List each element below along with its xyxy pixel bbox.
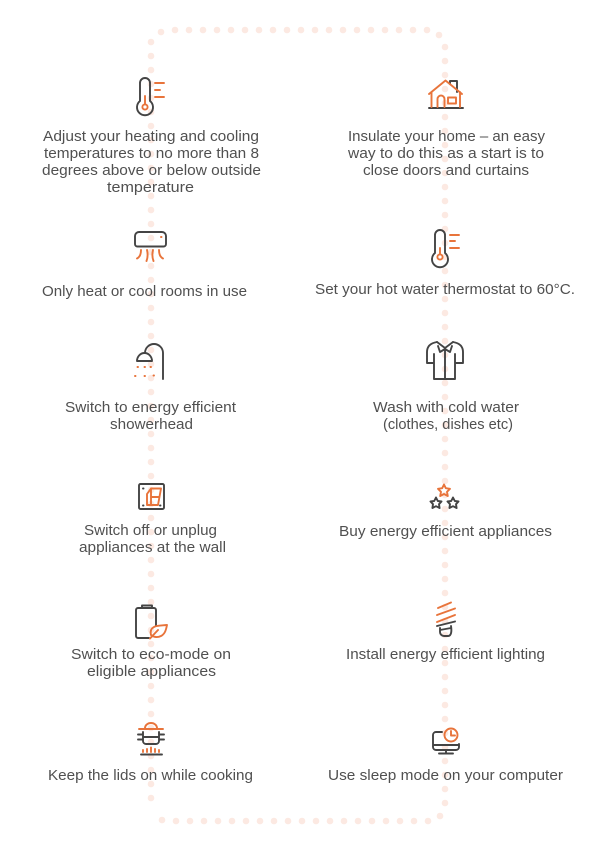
icon: battery with leaf: [136, 606, 167, 638]
text: showerhead: [65, 399, 237, 433]
text: lids: Keep the lids on while cooking: [48, 767, 253, 784]
tip: eco-mode: [71, 606, 231, 680]
text: eco-mode: eligible appliances: [87, 663, 216, 680]
tip: buy efficient appliances: [339, 484, 552, 540]
text: switch off: [79, 522, 226, 556]
tip: keep lids on: [48, 723, 253, 784]
text: insulate: [347, 128, 545, 179]
text: switch off: Switch off or unplug: [84, 522, 217, 539]
text: buy: Buy energy efficient appliances: [339, 523, 552, 540]
text: insulate: way to do this as a start is to: [347, 145, 544, 162]
text: adjust heating: degrees above or below outside: [42, 162, 261, 179]
tip: sleep mode: [328, 728, 563, 784]
text: sleep: Use sleep mode on your computer: [328, 767, 563, 784]
text: adjust heating: Adjust your heating and cooling: [43, 128, 259, 145]
icon: wall switch: [139, 484, 164, 509]
text: switch off: appliances at the wall: [79, 539, 226, 556]
text: eco-mode: [71, 646, 231, 680]
tip: only heat or cool rooms in use: [42, 232, 247, 300]
tip: wash with cold water: [373, 342, 519, 433]
text: wash: (clothes, dishes etc): [383, 416, 513, 433]
icon: showerhead: [135, 344, 163, 379]
icon: thermometer: [432, 230, 459, 267]
tip: adjust heating and cooling: [42, 78, 261, 196]
text: only heat: Only heat or cool rooms in use: [42, 283, 247, 300]
tip: switch off or unplug: [79, 484, 226, 556]
text: insulate: Insulate your home – an easy: [348, 128, 545, 145]
text: lighting: Install energy efficient lighting: [346, 646, 545, 663]
dotted border path: [151, 29, 445, 823]
icon: three stars: [430, 484, 458, 508]
icon: air conditioner: [135, 232, 166, 261]
text: adjust heating: temperature: [107, 179, 194, 196]
icon: spiral bulb: [437, 602, 455, 636]
icon: computer with clock: [433, 728, 459, 754]
text: thermostat: Set your hot water thermostat to 60°C.: [315, 281, 575, 298]
icon: shirt: [427, 342, 463, 379]
tip: insulate your home: [347, 80, 545, 179]
icon: thermometer: [137, 78, 164, 115]
tip: energy efficient showerhead: [65, 344, 237, 433]
text: showerhead: Switch to energy efficient: [65, 399, 237, 416]
text: adjust heating: temperatures to no more than 8: [44, 145, 259, 162]
text: wash: Wash with cold water: [373, 399, 519, 416]
text: wash: [373, 399, 519, 433]
text: adjust heating: [42, 128, 261, 196]
tip: efficient lighting: [346, 602, 545, 663]
text: insulate: close doors and curtains: [363, 162, 529, 179]
text: eco-mode: Switch to eco-mode on: [71, 646, 231, 663]
icon: cooking pot: [138, 723, 164, 754]
icon: house: [429, 80, 463, 108]
text: showerhead: showerhead: [110, 416, 193, 433]
tip: set hot water thermostat: [315, 230, 575, 298]
